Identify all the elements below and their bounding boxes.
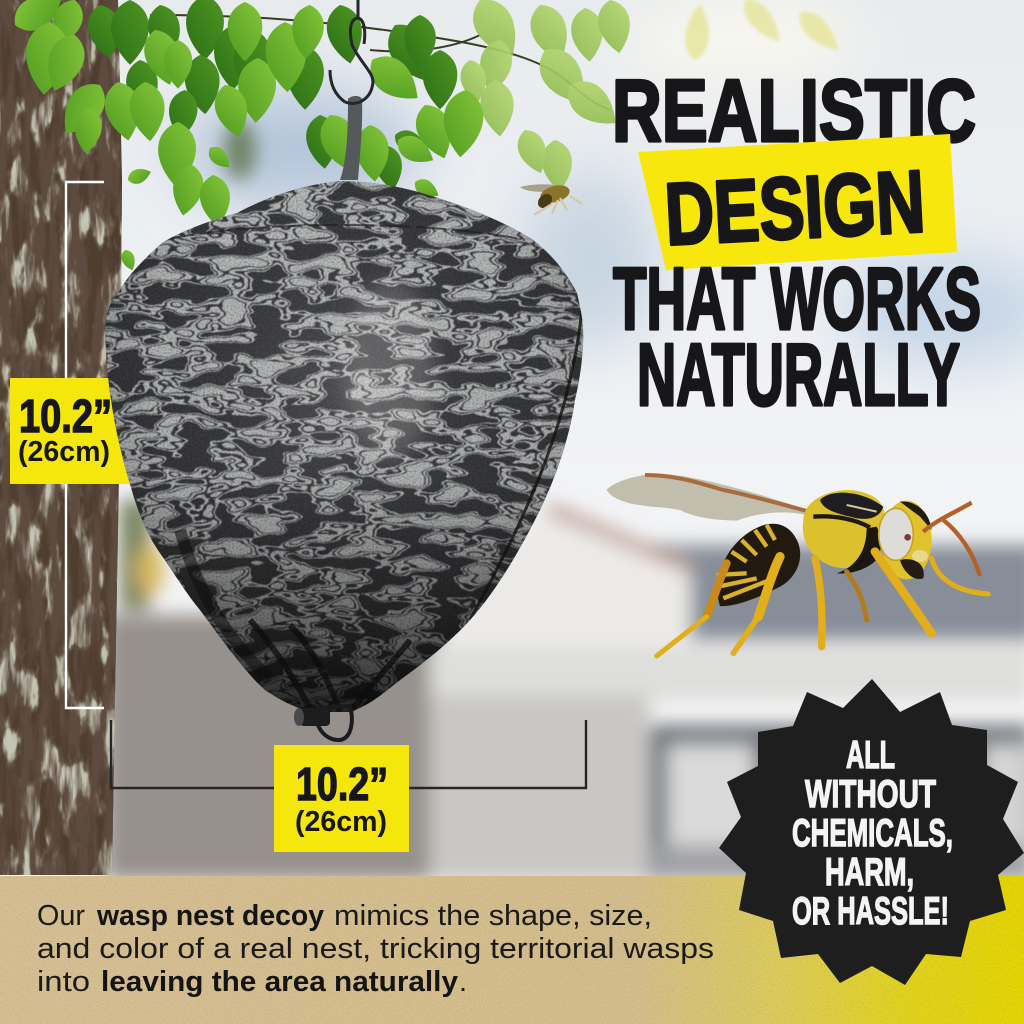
description text: Our <box>37 900 85 932</box>
height label: (26cm) <box>18 436 110 468</box>
wasp legs <box>657 552 988 656</box>
height dimension bracket <box>66 182 104 708</box>
wasp abdomen <box>717 524 800 606</box>
antennae <box>923 503 980 576</box>
wasp head <box>879 501 932 579</box>
description text: wasp nest decoy <box>96 900 324 932</box>
tree branch leaves <box>7 0 635 272</box>
badge text: HARM, <box>825 851 914 894</box>
height label: 10.2” <box>19 390 112 442</box>
description text <box>37 900 714 998</box>
wing veins <box>645 475 822 515</box>
description text: leaving the area naturally <box>101 966 458 998</box>
width label <box>274 745 409 852</box>
width label: 10.2” <box>296 758 388 810</box>
tree trunk <box>0 0 125 880</box>
hanging hook and strap <box>330 0 373 180</box>
bottom paper panel <box>0 876 1024 1024</box>
badge text: WITHOUT <box>805 773 936 816</box>
wasp nest decoy <box>100 180 590 740</box>
description text: and color of a real nest, tricking territorial wasps <box>37 933 714 965</box>
width dimension bracket <box>111 720 586 788</box>
blurred leaves in foreground <box>683 0 846 61</box>
yellow highlight with design: DESIGN <box>662 151 927 264</box>
description text: . <box>459 966 467 998</box>
description text: mimics the shape, size, <box>334 900 652 932</box>
wasp thorax <box>803 490 885 574</box>
small flying wasp <box>520 182 582 215</box>
starburst badge <box>719 679 1024 985</box>
description text: into <box>37 966 90 998</box>
title <box>612 61 981 424</box>
drawstring toggle <box>294 706 352 740</box>
wasp wing <box>607 473 823 521</box>
badge text: ALL <box>846 734 895 777</box>
badge text <box>792 734 953 933</box>
width label: (26cm) <box>295 806 387 838</box>
large wasp <box>607 473 988 656</box>
height label <box>10 378 135 484</box>
